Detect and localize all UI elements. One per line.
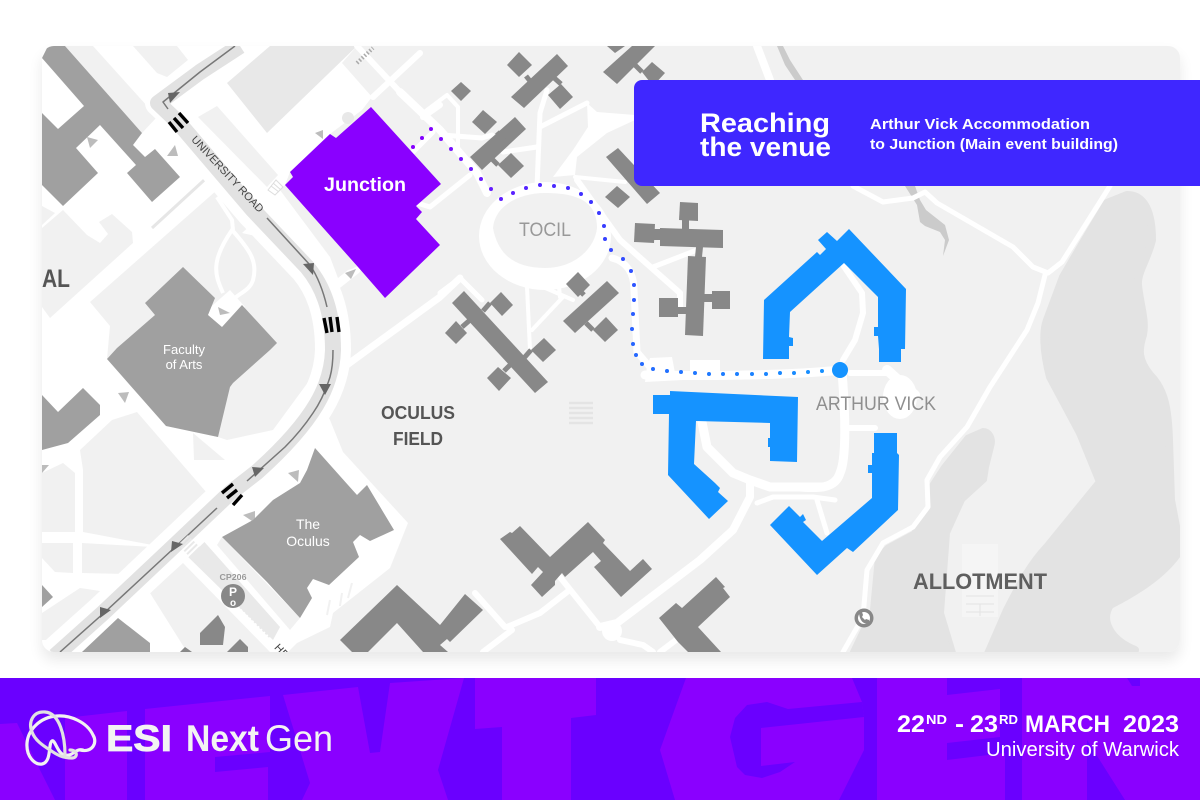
label: The Oculus: The bbox=[296, 516, 320, 532]
building: Arthur Vick south block bbox=[770, 433, 899, 575]
callout subtitle: Arthur Vick Accommodation bbox=[870, 116, 1090, 133]
white ground areas bbox=[42, 46, 408, 652]
icon: parking: P bbox=[229, 585, 237, 599]
label: Oculus Field: FIELD bbox=[393, 429, 443, 449]
car park label: CP206 bbox=[220, 573, 247, 582]
building: Arthur Vick north block bbox=[763, 229, 906, 362]
label: ALLOTMENT: ALLOTMENT bbox=[913, 569, 1048, 594]
entrance markers bbox=[42, 130, 356, 523]
panel: campus map bbox=[42, 46, 1180, 661]
background lettering bbox=[0, 678, 1200, 800]
callout: reaching the venue bbox=[634, 80, 1200, 186]
callout title: Reaching bbox=[700, 108, 830, 138]
logo text: Gen bbox=[265, 718, 333, 759]
road: University Road bbox=[55, 46, 333, 656]
callout title bbox=[700, 108, 831, 162]
pond bbox=[777, 46, 803, 80]
label: Oculus Field: OCULUS bbox=[381, 403, 455, 423]
route dotted path bbox=[411, 127, 824, 376]
allotment land left bbox=[850, 430, 993, 656]
footer banner bbox=[0, 678, 1200, 800]
buildings: small car park blocks bbox=[180, 615, 248, 652]
stairs near Oculus field bbox=[569, 403, 593, 423]
allotment land right bbox=[987, 195, 1178, 656]
east paths bbox=[843, 186, 1110, 652]
event date: 22 bbox=[897, 711, 925, 738]
buildings: west group bbox=[42, 46, 394, 652]
label: AL: AL bbox=[42, 265, 70, 293]
logo text bbox=[106, 718, 333, 759]
event date: - bbox=[955, 711, 964, 738]
event location: University of Warwick bbox=[986, 739, 1180, 761]
callout subtitle bbox=[870, 116, 1118, 153]
event date: 2023 bbox=[1123, 711, 1179, 738]
label: Oculus Field bbox=[382, 406, 454, 445]
background letter G counter bbox=[730, 702, 864, 778]
icon: parking bbox=[221, 584, 245, 609]
label: ARTHUR VICK: ARTHUR VICK bbox=[816, 394, 936, 415]
buildings: central residences bbox=[340, 46, 730, 652]
white paths bbox=[338, 46, 917, 652]
label: Faculty of Arts bbox=[164, 344, 205, 369]
label: TOCIL: TOCIL bbox=[519, 220, 571, 241]
event date bbox=[897, 711, 1179, 738]
label: The Oculus: Oculus bbox=[286, 533, 330, 549]
event date: ND bbox=[926, 712, 947, 727]
Tocil oval bbox=[493, 193, 597, 268]
callout title: the venue bbox=[700, 132, 831, 162]
building: Junction bbox=[285, 107, 441, 298]
label: Junction: Junction bbox=[324, 175, 406, 196]
label: HE road: HE bbox=[272, 642, 291, 661]
event date: RD bbox=[999, 712, 1018, 727]
logo mark bbox=[27, 712, 95, 764]
icon: parking: o bbox=[230, 598, 236, 609]
event date: MARCH bbox=[1025, 711, 1110, 738]
label: The Oculus bbox=[286, 519, 330, 546]
callout subtitle: to Junction (Main event building) bbox=[870, 136, 1118, 153]
building: Arthur Vick west block bbox=[653, 391, 798, 519]
route start marker bbox=[832, 362, 848, 378]
allotment plot bbox=[966, 596, 994, 616]
event date: 23 bbox=[970, 711, 998, 738]
icon: phone bbox=[854, 608, 874, 628]
logo text: Next bbox=[186, 718, 259, 759]
label: Faculty of Arts: Faculty bbox=[163, 342, 205, 357]
pedestrian crossings bbox=[169, 113, 339, 505]
label: Faculty of Arts: of Arts bbox=[166, 357, 203, 372]
road arrows bbox=[100, 92, 331, 618]
label: University Road: UNIVERSITY ROAD bbox=[189, 134, 266, 215]
logo text: ESI bbox=[106, 718, 172, 759]
